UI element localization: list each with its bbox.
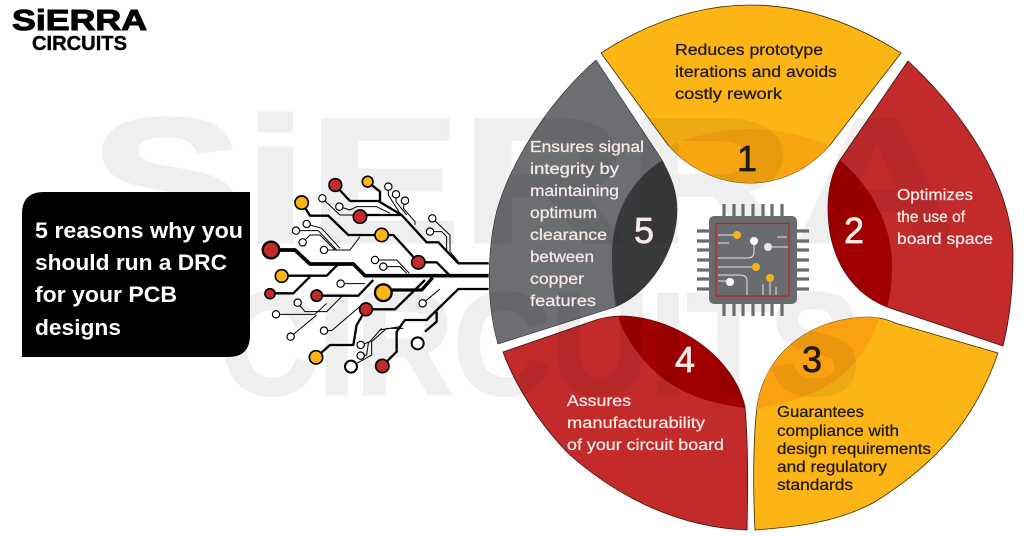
text: reason 4: Assures: [567, 393, 631, 410]
number 2: 2: [844, 210, 864, 251]
text: reason 3: [777, 404, 931, 494]
text: reason 5: between: [530, 249, 594, 266]
tree nodes: [263, 176, 425, 373]
text: reason 3: standards: [777, 477, 853, 494]
text: reason 1: [675, 42, 837, 103]
title panel: designs: [35, 315, 121, 340]
text: reason 4: [567, 393, 724, 454]
text: reason 2: [897, 187, 993, 248]
text: reason 5: integrity by: [530, 161, 619, 178]
text: reason 2: Optimizes: [897, 187, 973, 204]
petal 4: red segment: [503, 310, 760, 530]
number 5: 5: [634, 210, 654, 251]
logo: [12, 5, 147, 55]
text: reason 5: Ensures signal: [530, 139, 644, 156]
petal 1: yellow segment: [601, 5, 901, 190]
watermark: Sierra Circuits: CIRCUITS: [220, 263, 860, 425]
text: reason 3: compliance with: [777, 423, 899, 440]
text: reason 2: board space: [897, 231, 993, 248]
title panel: [22, 192, 250, 357]
petal 5: grey segment: [488, 60, 678, 344]
number 4: 4: [675, 339, 695, 380]
title panel: for your PCB: [35, 282, 177, 307]
text: reason 2: the use of: [897, 209, 966, 226]
text: reason 3: design requirements: [777, 441, 931, 458]
petal 2: red segment: [828, 60, 1014, 346]
text: reason 1: Reduces prototype: [675, 42, 823, 59]
logo: CIRCUITS: [32, 33, 127, 55]
text: reason 5: [530, 139, 644, 310]
text: reason 1: costly rework: [675, 86, 782, 103]
watermark: Sierra Circuits: SiERRA: [90, 81, 960, 280]
central chip icon: [697, 204, 809, 316]
title panel: 5 reasons why you: [35, 218, 243, 243]
text: reason 3: and regulatory: [777, 459, 887, 476]
logo: SiERRA: [12, 5, 147, 37]
number 3: 3: [802, 339, 822, 380]
text: reason 4: manufacturability: [567, 415, 705, 432]
title panel: should run a DRC: [35, 250, 227, 275]
text: reason 5: features: [530, 293, 596, 310]
petal 3: yellow segment: [753, 316, 998, 530]
number 1: 1: [737, 138, 757, 179]
circuit tree illustration: [263, 176, 489, 373]
text: reason 5: maintaining: [530, 183, 619, 200]
text: reason 5: clearance: [530, 227, 607, 244]
text: reason 1: iterations and avoids: [675, 64, 837, 81]
text: reason 5: optimum: [530, 205, 597, 222]
text: reason 4: of your circuit board: [567, 437, 724, 454]
watermark: Sierra Circuits: [90, 81, 960, 425]
text: reason 3: Guarantees: [777, 404, 864, 421]
text: reason 5: copper: [530, 271, 584, 288]
